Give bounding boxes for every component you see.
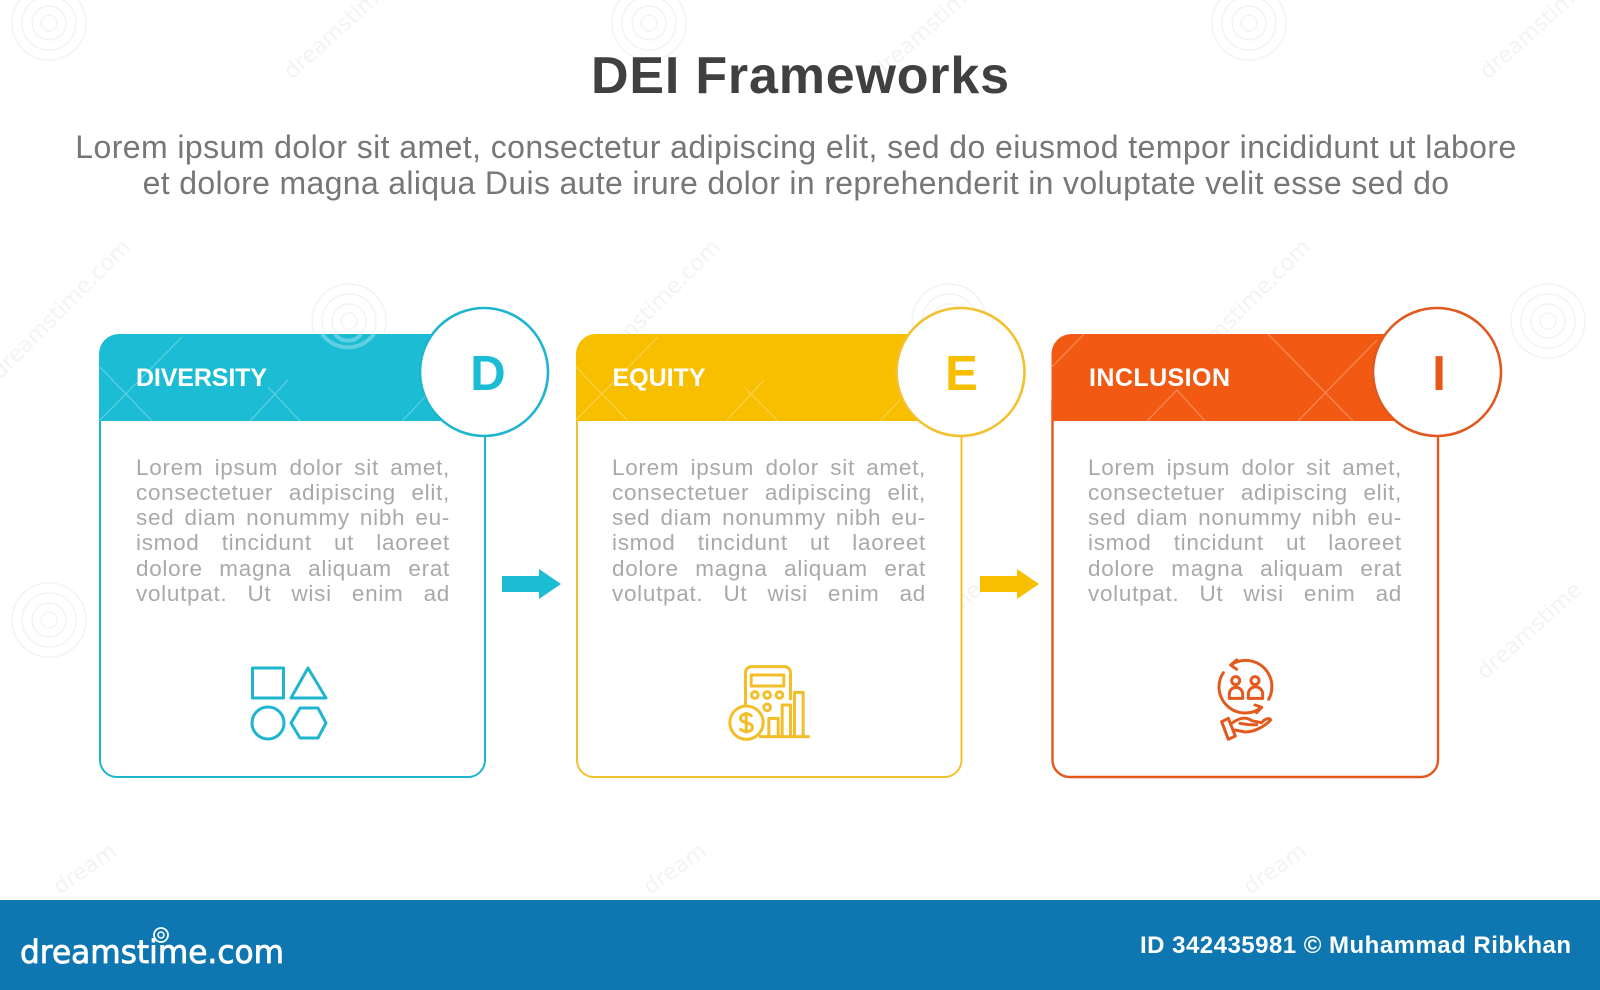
letter circle — [1373, 308, 1501, 436]
body text: consectetuer adipiscing elit, — [612, 480, 926, 505]
panel: diversity — [99, 306, 550, 778]
header label: DIVERSITY — [136, 364, 267, 392]
icon: calculator and coin — [729, 667, 809, 739]
body text: sed diam nonummy nibh eu- — [136, 505, 450, 530]
header label: INCLUSION — [1089, 364, 1230, 392]
text: dreamstime — [1472, 577, 1587, 684]
text: dream — [1239, 839, 1312, 900]
body text: Lorem ipsum dolor sit amet, — [136, 454, 450, 480]
body text: consectetuer adipiscing elit, — [136, 480, 450, 505]
icon: people and hand — [1219, 660, 1272, 739]
letter circle: D — [470, 347, 506, 401]
body text: dolore magna aliquam erat — [1088, 556, 1402, 581]
text: dreamstime.com — [1167, 235, 1316, 384]
panel: inclusion — [1051, 306, 1502, 778]
text: dream — [49, 839, 122, 900]
text: dreamstime — [277, 567, 392, 674]
card outline — [1052, 400, 1438, 777]
panel: equity — [576, 306, 1026, 778]
header bar — [1052, 334, 1423, 421]
arrow: diversity to equity — [502, 569, 561, 599]
subtitle text: et dolore magna aliqua Duis aute irure dolor in reprehenderit in voluptate velit esse sed do — [143, 164, 1449, 200]
body text — [612, 454, 926, 606]
body text — [1088, 454, 1402, 606]
logo: dreamstime.com — [20, 933, 284, 971]
header label: EQUITY — [612, 364, 705, 392]
subtitle text: Lorem ipsum dolor sit amet, consectetur adipiscing elit, sed do eiusmod tempor incididunt ut labore — [75, 129, 1517, 165]
text: dreamstime — [872, 577, 987, 684]
card outline — [100, 400, 485, 777]
letter circle — [420, 308, 548, 436]
body text: ismod tincidunt ut laoreet — [136, 530, 450, 555]
card outline — [576, 400, 961, 777]
body text: dolore magna aliquam erat — [136, 556, 450, 581]
body text: sed diam nonummy nibh eu- — [612, 505, 926, 530]
body text: volutpat. Ut wisi enim ad — [136, 581, 450, 606]
header bar — [99, 334, 470, 421]
arrow: equity to inclusion — [980, 569, 1039, 599]
letter circle: E — [945, 347, 977, 401]
body text: Lorem ipsum dolor sit amet, — [1088, 454, 1402, 480]
body text: ismod tincidunt ut laoreet — [612, 530, 926, 555]
letter circle — [896, 308, 1024, 436]
body text: volutpat. Ut wisi enim ad — [612, 581, 926, 606]
letter circle: I — [1432, 347, 1446, 401]
subtitle text — [75, 129, 1517, 200]
body text: Lorem ipsum dolor sit amet, — [612, 454, 926, 480]
body text: volutpat. Ut wisi enim ad — [1088, 581, 1402, 606]
body text: ismod tincidunt ut laoreet — [1088, 530, 1402, 555]
body text — [136, 454, 450, 606]
body text: consectetuer adipiscing elit, — [1088, 480, 1402, 505]
body text: sed diam nonummy nibh eu- — [1088, 505, 1402, 530]
footer bar — [0, 900, 1600, 990]
icon: shapes — [252, 668, 326, 739]
image credit: ID 342435981 © Muhammad Ribkhan — [1140, 932, 1571, 959]
body text: dolore magna aliquam erat — [612, 556, 926, 581]
header bar — [576, 334, 946, 421]
text: dreamstime.com — [577, 235, 726, 384]
text: dream — [639, 839, 712, 900]
